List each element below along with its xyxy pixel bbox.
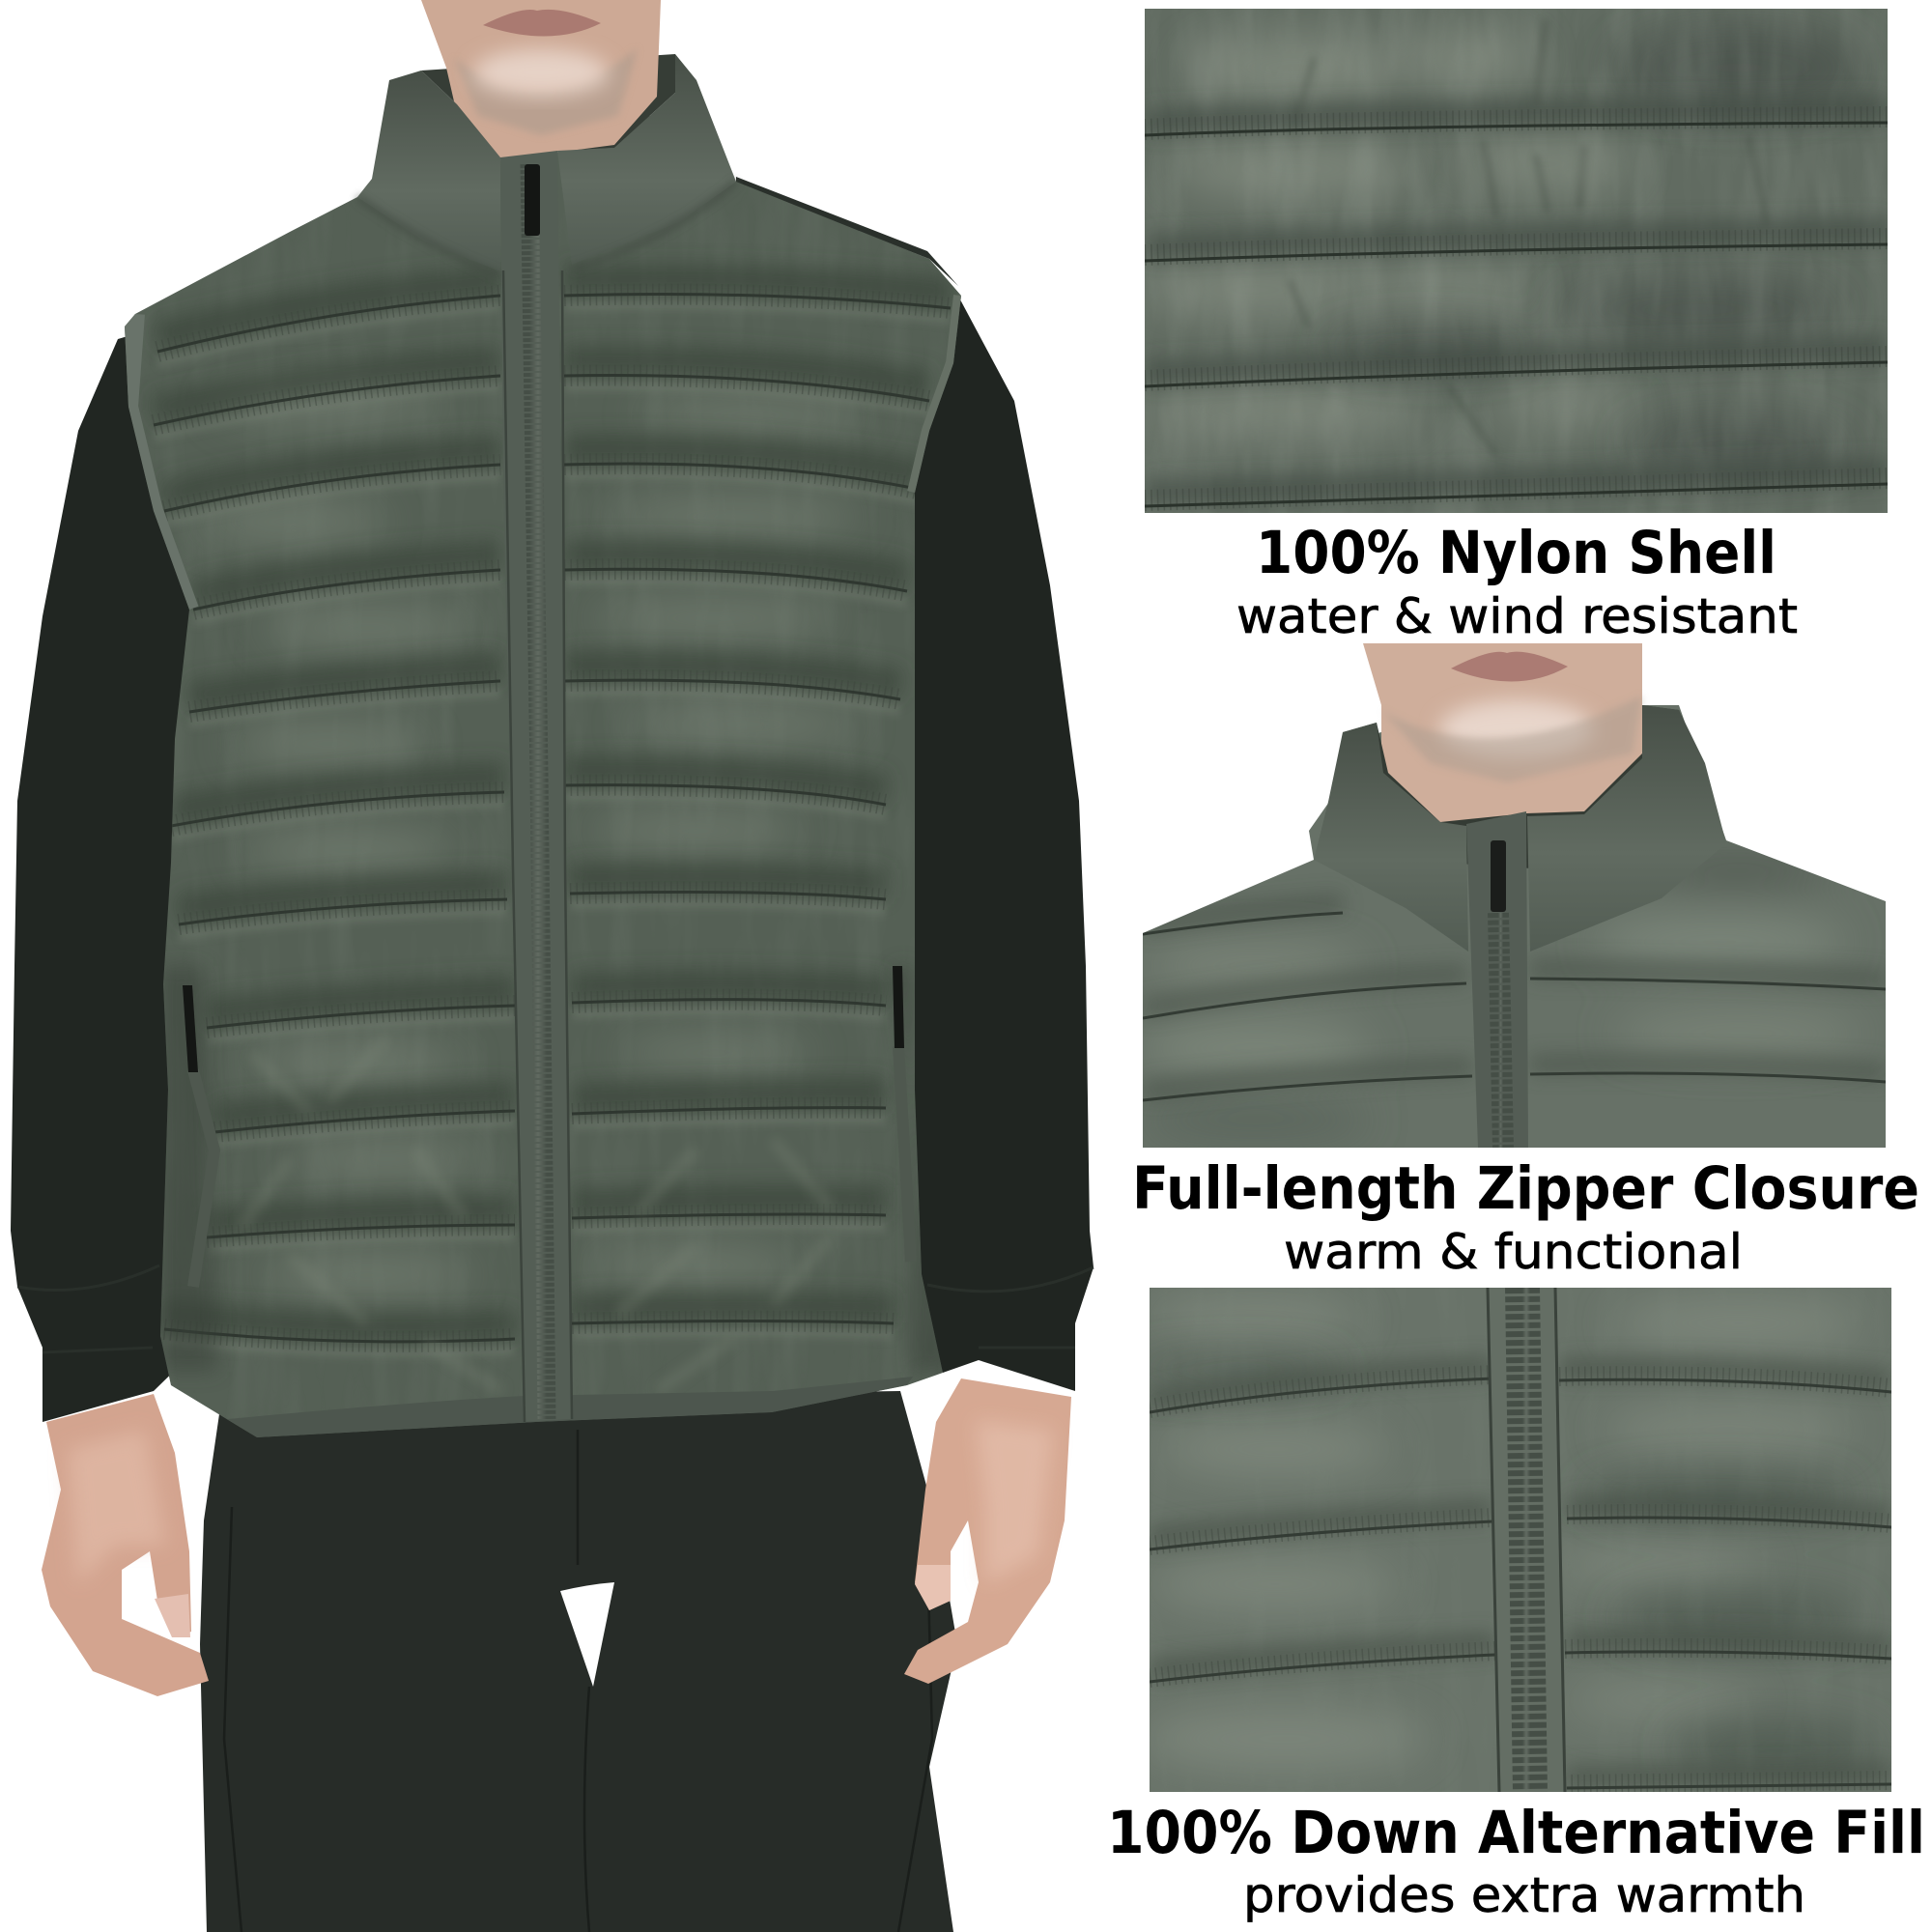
seam stitching	[154, 295, 951, 1342]
text: down alternative caption	[1107, 1799, 1925, 1923]
text: nylon shell caption	[1236, 519, 1798, 644]
light fabric areas	[1140, 29, 1642, 436]
dark streak texture	[1150, 1288, 1891, 1792]
quilt shadow above seams	[1143, 903, 1886, 1091]
crotch gap	[560, 1582, 614, 1687]
zipper tape	[1466, 811, 1528, 1148]
zipper pull	[1491, 840, 1506, 912]
zipper tape	[1488, 1288, 1567, 1792]
right hand	[904, 1378, 1071, 1684]
zipper edges	[1488, 1288, 1565, 1792]
sweater sleeve left	[11, 328, 213, 1422]
seam puckers	[1145, 117, 1888, 500]
dark right area	[1323, 24, 1864, 473]
trouser fold highlights	[224, 1430, 932, 1932]
collar left	[1314, 723, 1468, 952]
light streak texture	[1145, 9, 1888, 513]
seam puckers	[154, 295, 951, 1342]
neck and chin	[1363, 643, 1658, 826]
vest body	[125, 0, 966, 1439]
subheading: warm & functional	[1284, 1224, 1743, 1280]
left hand	[42, 1394, 209, 1696]
dark streak texture	[1145, 9, 1888, 513]
dark streak texture	[126, 184, 966, 1439]
seam lines	[1143, 913, 1886, 1100]
zipper teeth	[1498, 913, 1503, 1148]
collar right	[557, 54, 736, 265]
side shadow	[160, 966, 952, 1372]
subheading: provides extra warmth	[1243, 1867, 1805, 1923]
zipper edges	[503, 270, 572, 1422]
sweater sleeve right	[889, 285, 1094, 1391]
zipper teeth	[529, 164, 547, 1419]
zipper pull	[525, 164, 540, 236]
quilt shadow above seams	[154, 279, 951, 1326]
armhole binding	[128, 314, 189, 610]
fabric shading light	[1140, 1294, 1864, 1772]
face and neck	[421, 0, 661, 162]
diagonal wrinkles	[242, 1088, 830, 1352]
text: zipper closure caption	[1132, 1154, 1919, 1280]
fabric shading dark	[1130, 1356, 1884, 1776]
collar inside	[1343, 705, 1700, 869]
hem band	[217, 1377, 913, 1437]
seam lines	[1145, 123, 1888, 506]
seam puckers	[1150, 1375, 1891, 1784]
heading: 100% Nylon Shell	[1256, 519, 1776, 587]
panel: down alternative fill close-up	[1130, 1288, 1891, 1792]
subheading: water & wind resistant	[1236, 588, 1798, 644]
collar crease shadows	[357, 182, 736, 275]
quilt shadow above seams	[1150, 1367, 1891, 1776]
collar right	[1527, 705, 1726, 952]
zipper tape	[500, 151, 572, 1422]
seam lines	[1150, 1378, 1891, 1788]
body fabric	[1143, 705, 1886, 1148]
pocket left	[183, 985, 214, 1287]
collar left	[357, 71, 500, 271]
fabric shading	[1140, 852, 1886, 1138]
panel: nylon shell close-up	[1140, 9, 1888, 513]
fabric wrinkles	[1290, 19, 1768, 454]
quilt shadow above seams	[1145, 109, 1888, 493]
trousers	[200, 1391, 957, 1932]
fabric highlights	[193, 390, 869, 1294]
sweater above right shoulder	[736, 177, 958, 286]
panel: zipper closure close-up	[1140, 643, 1886, 1148]
quilt light below seams	[154, 306, 951, 1353]
cuff ribbing	[17, 1265, 1094, 1352]
pocket right	[893, 966, 911, 1262]
zipper teeth	[1522, 1288, 1530, 1792]
panel: full product photo of man wearing vest	[11, 0, 1094, 1932]
inside back of collar	[421, 54, 675, 157]
